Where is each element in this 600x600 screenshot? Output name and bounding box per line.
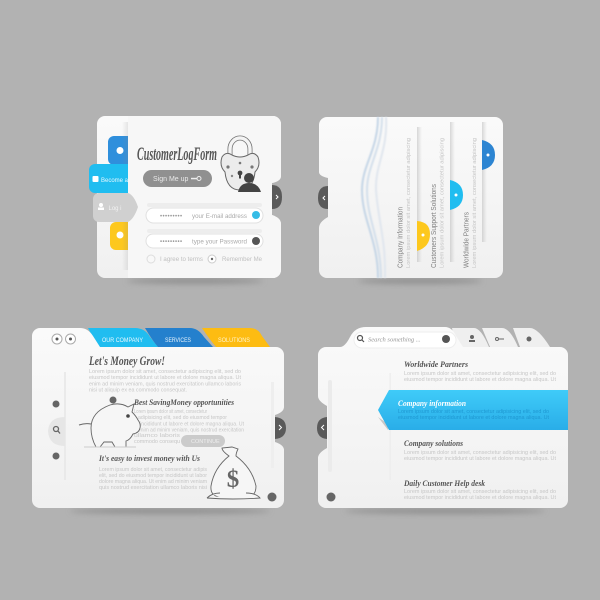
paragraph: ullamco laboris: [134, 433, 180, 439]
side strip: [328, 380, 332, 472]
icon: padlock: [221, 138, 261, 192]
tab: solutions: SOLUTIONS: [218, 337, 251, 344]
item: worldwide partners: Lorem ipsum dolor sit amet, consectetur adipisicing elit, sed do: [404, 371, 556, 377]
arrow tab: [318, 186, 328, 209]
tab: log in: [93, 193, 138, 222]
item: worldwide partners: eiusmod tempor incididunt ut labore et dolore magna aliqua. Ut: [404, 377, 556, 383]
paragraph: [99, 467, 207, 491]
paragraph: adipisicing elit, sed do eiusmod tempor: [138, 415, 227, 421]
input: password: •••••••••: [160, 240, 183, 246]
paragraph: enim ad minim veniam, quis nostrud exercitation ullamco laboris: [89, 382, 241, 388]
item: worldwide partners: Worldwide Partners: [404, 360, 468, 369]
item: worldwide partners: [404, 360, 556, 383]
tab: blue check: [108, 136, 134, 165]
column: company information: Lorem ipsum dolor sit amet, consectetur adipiscing: [406, 138, 412, 268]
front sheet: [128, 116, 281, 278]
tab: user: [452, 328, 489, 347]
item: company information highlight: [378, 390, 568, 430]
vertical line: [390, 373, 391, 480]
search box: Search something ...: [368, 336, 421, 344]
item: company solutions: Company solutions: [404, 439, 463, 448]
arrow tab: [317, 417, 327, 439]
tab: services: SERVICES: [165, 337, 192, 344]
item: daily help desk: eiusmod tempor incididunt ut labore et dolore magna aliqua. Ut: [404, 495, 556, 501]
tab: solutions: [202, 328, 270, 347]
right strip: [271, 382, 274, 468]
item: company solutions: [404, 439, 556, 462]
input: email: your E-mail address: [192, 214, 247, 220]
wave decoration: [362, 117, 386, 278]
search box: [354, 332, 456, 348]
tab: services: [145, 328, 213, 347]
tab: blue: [482, 140, 495, 170]
item: daily help desk: Daily Customer Help desk: [403, 479, 485, 488]
options: I agree to terms: [160, 257, 203, 263]
paragraph: quis nostrud exercitation ullamco laboris nisi: [99, 485, 207, 491]
icon: piggy bank: [79, 396, 140, 447]
paragraph: Lorem ipsum dolor sit amet, consectetur: [134, 409, 207, 415]
item: company solutions: Lorem ipsum dolor sit amet, consectetur adipisicing elit, sed do: [404, 450, 556, 456]
sheet: [32, 328, 284, 508]
column: company information: Company Information: [398, 207, 404, 268]
item: company information highlight: eiusmod tempor incididunt ut labore et dolore magna aliqua. Ut: [398, 415, 549, 421]
item: company information highlight: Lorem ipsum dolor sit amet, consectetur adipisicing elit, sed do: [398, 409, 549, 415]
subheading: best saving: Best SavingMoney opportunities: [133, 398, 234, 407]
options: Remember Me: [222, 257, 263, 263]
icon: money bag: [207, 447, 260, 499]
tab: key: [482, 328, 518, 347]
paragraph: [134, 409, 244, 445]
column: worldwide partners: Lorem ipsum dolor sit amet, consectetur adipiscing: [472, 138, 478, 268]
options: [147, 255, 263, 263]
input: password: type your Password: [192, 240, 247, 246]
item: company information highlight: Company information: [398, 399, 467, 408]
tab: log in: Log i: [108, 206, 122, 212]
sheet: [318, 327, 568, 508]
tab: yellow: [417, 221, 430, 251]
item: company solutions: eiusmod tempor incididunt ut labore et dolore magna aliqua. Ut: [404, 456, 556, 462]
column: customer support: [431, 138, 446, 268]
input: password: [146, 229, 263, 248]
column: customer support: Lorem ipsum dolor sit amet, consectetur adipiscing: [440, 138, 446, 268]
tab: become a member: Become a: [101, 178, 129, 184]
icon: money bag: $: [227, 466, 239, 493]
paragraph: incididunt ut labore et dolore magna aliqua. Ut: [140, 422, 244, 428]
title: CustomerLogForm: [137, 144, 217, 165]
close: [268, 492, 276, 502]
column: worldwide partners: [464, 138, 478, 268]
button: sign me up: [143, 170, 212, 187]
tab: our company: OUR COMPANY: [102, 337, 144, 344]
input: email: [146, 203, 263, 223]
paragraph: eiusmod tempor incididunt ut labore et dolore magna aliqua. Ut: [89, 375, 241, 381]
tab: yellow plus: [110, 222, 134, 250]
paragraph: Lorem ipsum dolor sit amet, consectetur adipis: [99, 467, 207, 473]
panel: customer log form: [89, 116, 282, 284]
column shadows: [417, 122, 487, 262]
button: continue: [181, 435, 225, 447]
sheet shadow: [122, 122, 128, 270]
column: worldwide partners: Worldwide Partners: [464, 212, 470, 268]
heading: Let's Money Grow!: [88, 353, 165, 368]
paragraph: elit, sed do eiusmod tempor incididunt ut labor: [99, 473, 207, 479]
paragraph: [89, 369, 241, 394]
button: continue: CONTINUE: [191, 439, 220, 445]
tab: our company: [88, 328, 158, 347]
paragraph: dolore magna aliqua. Ut enim ad minim veniam: [99, 479, 207, 485]
column: customer support: Customers Support Solutions: [431, 184, 438, 268]
paragraph: Lorem ipsum dolor sit amet, consectetur adipiscing elit, sed do: [89, 369, 241, 375]
paragraph: enim ad minim veniam, quis nostrud exercitation: [138, 428, 244, 434]
paragraph: nisi ut aliquip ex ea commodo consequat.: [89, 388, 187, 394]
arrow tab: [272, 185, 282, 209]
panel: vertical tabs: [318, 117, 503, 284]
close: [326, 492, 336, 502]
item: daily help desk: [403, 479, 556, 501]
side nav: [48, 372, 65, 480]
tab: become a member: [89, 164, 129, 193]
column: company information: [398, 138, 412, 268]
tab: cyan: [450, 180, 463, 210]
tab: settings: [513, 328, 550, 347]
paragraph: commodo consequ: [134, 439, 180, 445]
window buttons: [52, 334, 76, 344]
input: email: •••••••••: [160, 214, 183, 220]
button: sign me up: Sign Me up: [153, 176, 189, 183]
arrow tab: [275, 417, 286, 439]
panel: money grow: [32, 328, 286, 514]
subheading: invest: It's easy to invest money with Us: [98, 454, 200, 463]
panel: search list: [317, 327, 568, 514]
item: daily help desk: Lorem ipsum dolor sit amet, consectetur adipisicing elit, sed do: [404, 489, 556, 495]
